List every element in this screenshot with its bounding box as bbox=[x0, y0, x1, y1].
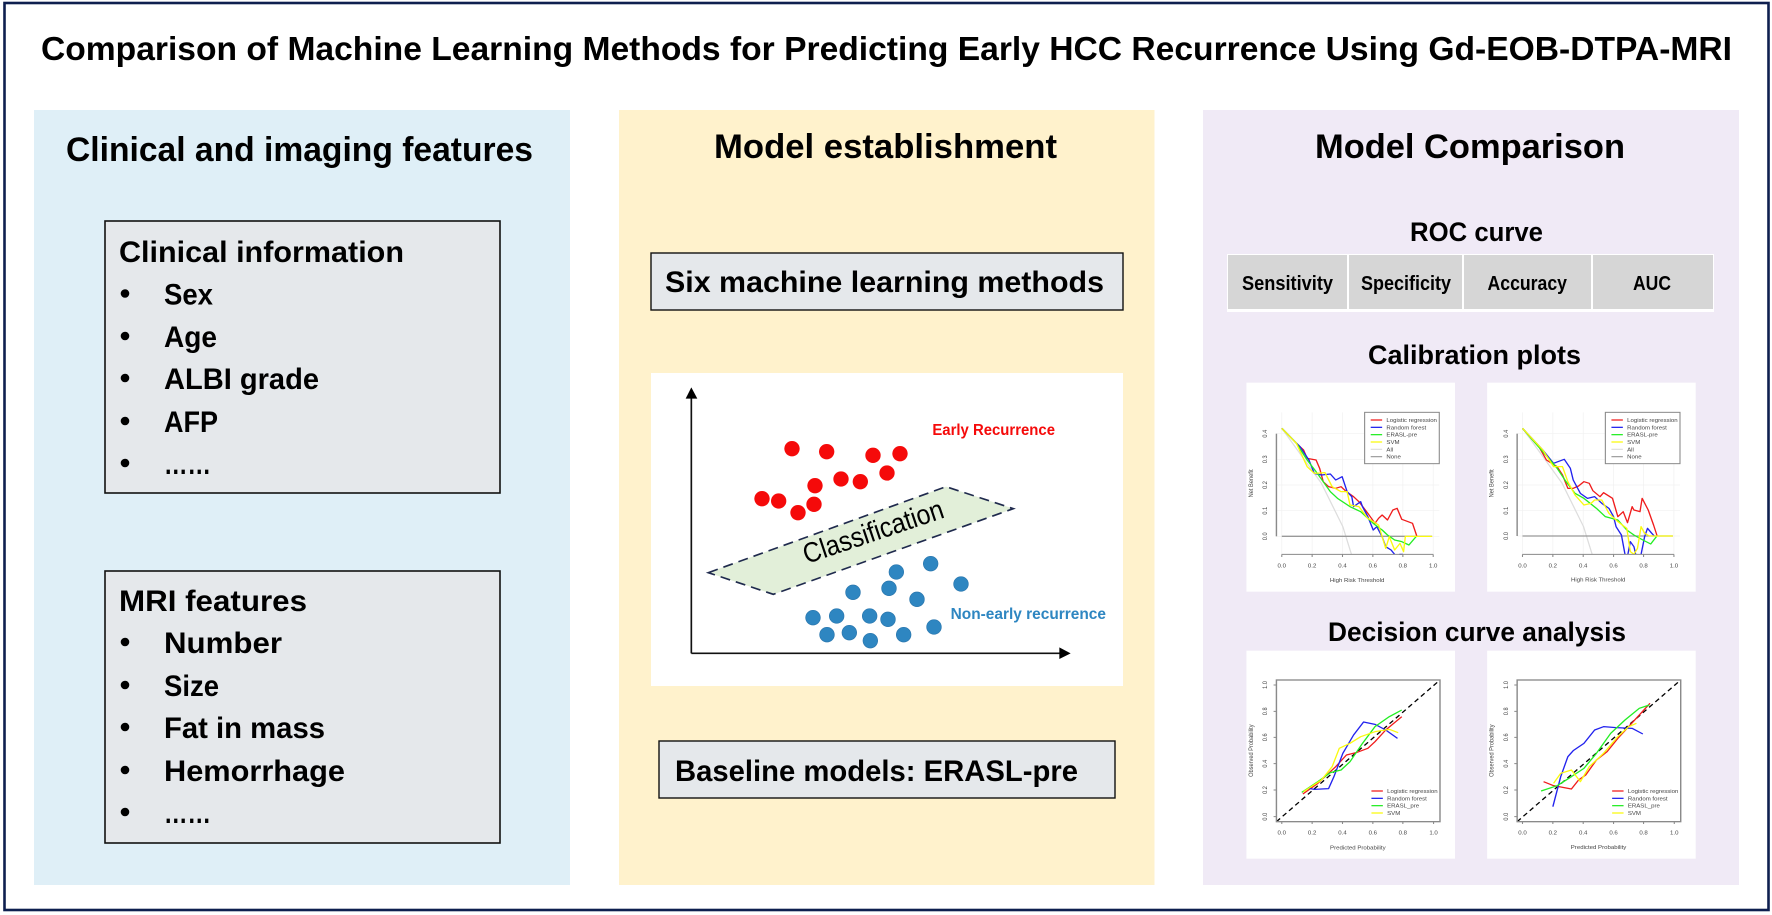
chart: observed vs predicted probability, right: Observed Probability bbox=[1489, 724, 1496, 777]
chart: observed vs predicted probability, right: 0.4 bbox=[1579, 830, 1588, 836]
box: six machine learning methods bbox=[651, 253, 1123, 310]
chart: observed vs predicted probability, right: 0.0 bbox=[1504, 812, 1510, 821]
chart: observed vs predicted probability, left: Random forest bbox=[1387, 796, 1427, 802]
chart: net benefit curves, right: 0.0 bbox=[1518, 563, 1527, 569]
chart: net benefit curves, left: 1.0 bbox=[1429, 563, 1438, 569]
red points: early recurrence bbox=[754, 441, 908, 520]
chart: net benefit curves, right bbox=[1487, 383, 1696, 592]
chart: observed vs predicted probability, left: SVM bbox=[1387, 811, 1400, 817]
box: clinical information: Sex bbox=[164, 278, 213, 312]
axes bbox=[686, 387, 1071, 659]
chart: net benefit curves, right: 0.0 bbox=[1504, 531, 1510, 540]
chart: observed vs predicted probability, right: 1.0 bbox=[1670, 830, 1679, 836]
box: MRI features: MRI features bbox=[119, 585, 307, 618]
chart: observed vs predicted probability, left: Logistic regression bbox=[1387, 789, 1438, 795]
chart: net benefit curves, left: 0.2 bbox=[1308, 563, 1316, 569]
chart: net benefit curves, left: 0.4 bbox=[1338, 563, 1347, 569]
chart: net benefit curves, left: 0.1 bbox=[1263, 507, 1269, 515]
chart: net benefit curves, right: 0.2 bbox=[1549, 563, 1557, 569]
chart: observed vs predicted probability, left: 0.8 bbox=[1263, 707, 1269, 715]
chart: net benefit curves, right: 0.2 bbox=[1504, 481, 1510, 489]
chart: observed vs predicted probability, right bbox=[1487, 651, 1696, 859]
panel: clinical and imaging features bbox=[34, 110, 570, 885]
chart: net benefit curves, left: High Risk Threshold bbox=[1330, 578, 1384, 584]
chart: net benefit curves, right: None bbox=[1627, 455, 1642, 461]
chart: observed vs predicted probability, left: 0.2 bbox=[1263, 786, 1269, 794]
metrics table: Specificity bbox=[1361, 273, 1452, 295]
chart: net benefit curves, left: 0.0 bbox=[1263, 532, 1269, 540]
box: baseline models bbox=[659, 741, 1115, 798]
box: MRI features bbox=[105, 571, 500, 843]
chart: observed vs predicted probability, left: 0.8 bbox=[1399, 830, 1407, 836]
chart: observed vs predicted probability, right: 0.0 bbox=[1518, 830, 1527, 836]
chart: observed vs predicted probability, left: 0.2 bbox=[1308, 830, 1316, 836]
chart: net benefit curves, right: All bbox=[1627, 447, 1634, 453]
chart: net benefit curves, left: All bbox=[1386, 447, 1393, 453]
box: clinical information bbox=[105, 221, 500, 493]
chart: observed vs predicted probability, left: Predicted Probability bbox=[1330, 845, 1386, 851]
chart: net benefit curves, right: ERASL-pre bbox=[1627, 433, 1658, 439]
heading: model comparison: Model Comparison bbox=[1315, 128, 1625, 166]
chart: net benefit curves, left: 0.4 bbox=[1263, 429, 1269, 438]
box: six machine learning methods: Six machine learning methods bbox=[665, 266, 1104, 299]
chart: observed vs predicted probability, right: Predicted Probability bbox=[1571, 845, 1626, 851]
chart: net benefit curves, right: 0.3 bbox=[1504, 455, 1510, 463]
title: Comparison of Machine Learning Methods for Predicting Early HCC Recurrence Using Gd-EOB-DTPA-MRI bbox=[41, 30, 1732, 67]
chart: observed vs predicted probability, left: 0.6 bbox=[1369, 830, 1377, 836]
box: clinical information: ALBI grade bbox=[164, 363, 319, 396]
box: clinical information: …… bbox=[164, 448, 211, 481]
chart: net benefit curves, left: 0.3 bbox=[1263, 455, 1269, 463]
panel: model comparison bbox=[1203, 110, 1739, 885]
label: early recurrence: Early Recurrence bbox=[932, 422, 1055, 439]
chart: net benefit curves, right: 0.8 bbox=[1639, 563, 1648, 569]
box: MRI features: Number bbox=[164, 627, 282, 660]
chart: net benefit curves, right: Net Benefit bbox=[1489, 469, 1496, 497]
box: clinical information: AFP bbox=[164, 406, 218, 439]
box: clinical information: Age bbox=[164, 321, 217, 354]
heading: calibration plots: Calibration plots bbox=[1368, 340, 1581, 370]
chart: net benefit curves, right: 0.6 bbox=[1609, 563, 1618, 569]
chart: net benefit curves, left: Logistic regression bbox=[1386, 418, 1437, 424]
chart: observed vs predicted probability, left: 0.6 bbox=[1263, 733, 1269, 741]
label: non-early recurrence: Non-early recurrence bbox=[951, 606, 1106, 623]
blue points: non-early recurrence bbox=[806, 556, 968, 648]
chart: net benefit curves, right: 0.4 bbox=[1579, 563, 1588, 569]
chart: observed vs predicted probability, left: 0.4 bbox=[1263, 759, 1269, 768]
chart: observed vs predicted probability, left bbox=[1246, 651, 1455, 859]
chart: net benefit curves, right: High Risk Threshold bbox=[1571, 577, 1625, 583]
chart: observed vs predicted probability, right: 0.8 bbox=[1639, 830, 1648, 836]
chart: observed vs predicted probability, left: 0.4 bbox=[1338, 830, 1347, 836]
chart: net benefit curves, left: 0.6 bbox=[1369, 563, 1377, 569]
chart: observed vs predicted probability, right: ERASL_pre bbox=[1628, 804, 1660, 810]
chart: observed vs predicted probability, left: 0.0 bbox=[1263, 812, 1269, 821]
chart: observed vs predicted probability, right: 0.6 bbox=[1609, 830, 1618, 836]
chart: observed vs predicted probability, right: 1.0 bbox=[1504, 680, 1510, 689]
heading: ROC curve: ROC curve bbox=[1410, 217, 1543, 247]
box: baseline models: Baseline models: ERASL-pre bbox=[675, 755, 1078, 788]
box: MRI features: Size bbox=[164, 670, 219, 703]
heading: decision curve analysis: Decision curve analysis bbox=[1328, 617, 1626, 647]
heading: clinical and imaging features: Clinical and imaging features bbox=[66, 131, 533, 169]
chart: net benefit curves, right: 1.0 bbox=[1670, 563, 1679, 569]
metrics table bbox=[1227, 254, 1714, 312]
chart: net benefit curves, left: ERASL-pre bbox=[1386, 433, 1417, 439]
chart: observed vs predicted probability, right: SVM bbox=[1628, 811, 1641, 817]
metrics table: Sensitivity bbox=[1242, 273, 1334, 295]
chart: observed vs predicted probability, right: 0.4 bbox=[1504, 759, 1510, 768]
chart: net benefit curves, right: 0.4 bbox=[1504, 429, 1510, 438]
plane label: Classification bbox=[799, 494, 948, 570]
chart: net benefit curves, right: SVM bbox=[1627, 440, 1640, 446]
box: clinical information: Clinical information bbox=[119, 236, 404, 269]
chart: observed vs predicted probability, left: 1.0 bbox=[1429, 830, 1439, 836]
chart: net benefit curves, right: Random forest bbox=[1627, 425, 1667, 431]
chart: observed vs predicted probability, left: 1.0 bbox=[1263, 680, 1269, 689]
chart: net benefit curves, left: 0.8 bbox=[1399, 563, 1407, 569]
chart: observed vs predicted probability, right: Logistic regression bbox=[1628, 789, 1678, 795]
chart: observed vs predicted probability, right: 0.2 bbox=[1504, 786, 1510, 794]
chart: net benefit curves, right: Logistic regression bbox=[1627, 418, 1678, 424]
classification diagram bbox=[651, 373, 1123, 686]
chart: observed vs predicted probability, right: 0.6 bbox=[1504, 733, 1510, 741]
chart: net benefit curves, left: 0.2 bbox=[1263, 481, 1269, 489]
chart: net benefit curves, right: 0.1 bbox=[1504, 507, 1510, 515]
chart: net benefit curves, left: None bbox=[1386, 455, 1401, 461]
metrics table: AUC bbox=[1633, 273, 1671, 295]
chart: observed vs predicted probability, left: 0.0 bbox=[1278, 830, 1287, 836]
box: MRI features: Fat in mass bbox=[164, 712, 325, 745]
chart: observed vs predicted probability, left: Observed Probability bbox=[1249, 724, 1255, 777]
chart: net benefit curves, left bbox=[1246, 383, 1455, 592]
box: MRI features: Hemorrhage bbox=[164, 755, 345, 788]
heading: model establishment: Model establishment bbox=[714, 128, 1057, 166]
chart: net benefit curves, left: Net Benefit bbox=[1249, 469, 1255, 497]
chart: net benefit curves, left: SVM bbox=[1386, 440, 1400, 446]
chart: observed vs predicted probability, right: Random forest bbox=[1628, 796, 1668, 802]
chart: observed vs predicted probability, right: 0.2 bbox=[1549, 830, 1557, 836]
metrics table: Accuracy bbox=[1488, 273, 1568, 295]
chart: net benefit curves, left: 0.0 bbox=[1278, 563, 1287, 569]
chart: observed vs predicted probability, right: 0.8 bbox=[1504, 707, 1510, 715]
classification plane bbox=[708, 487, 1013, 594]
chart: observed vs predicted probability, left: ERASL_pre bbox=[1387, 804, 1419, 810]
panel: model establishment bbox=[619, 110, 1154, 885]
box: MRI features: …… bbox=[164, 797, 211, 830]
chart: net benefit curves, left: Random forest bbox=[1386, 425, 1427, 431]
